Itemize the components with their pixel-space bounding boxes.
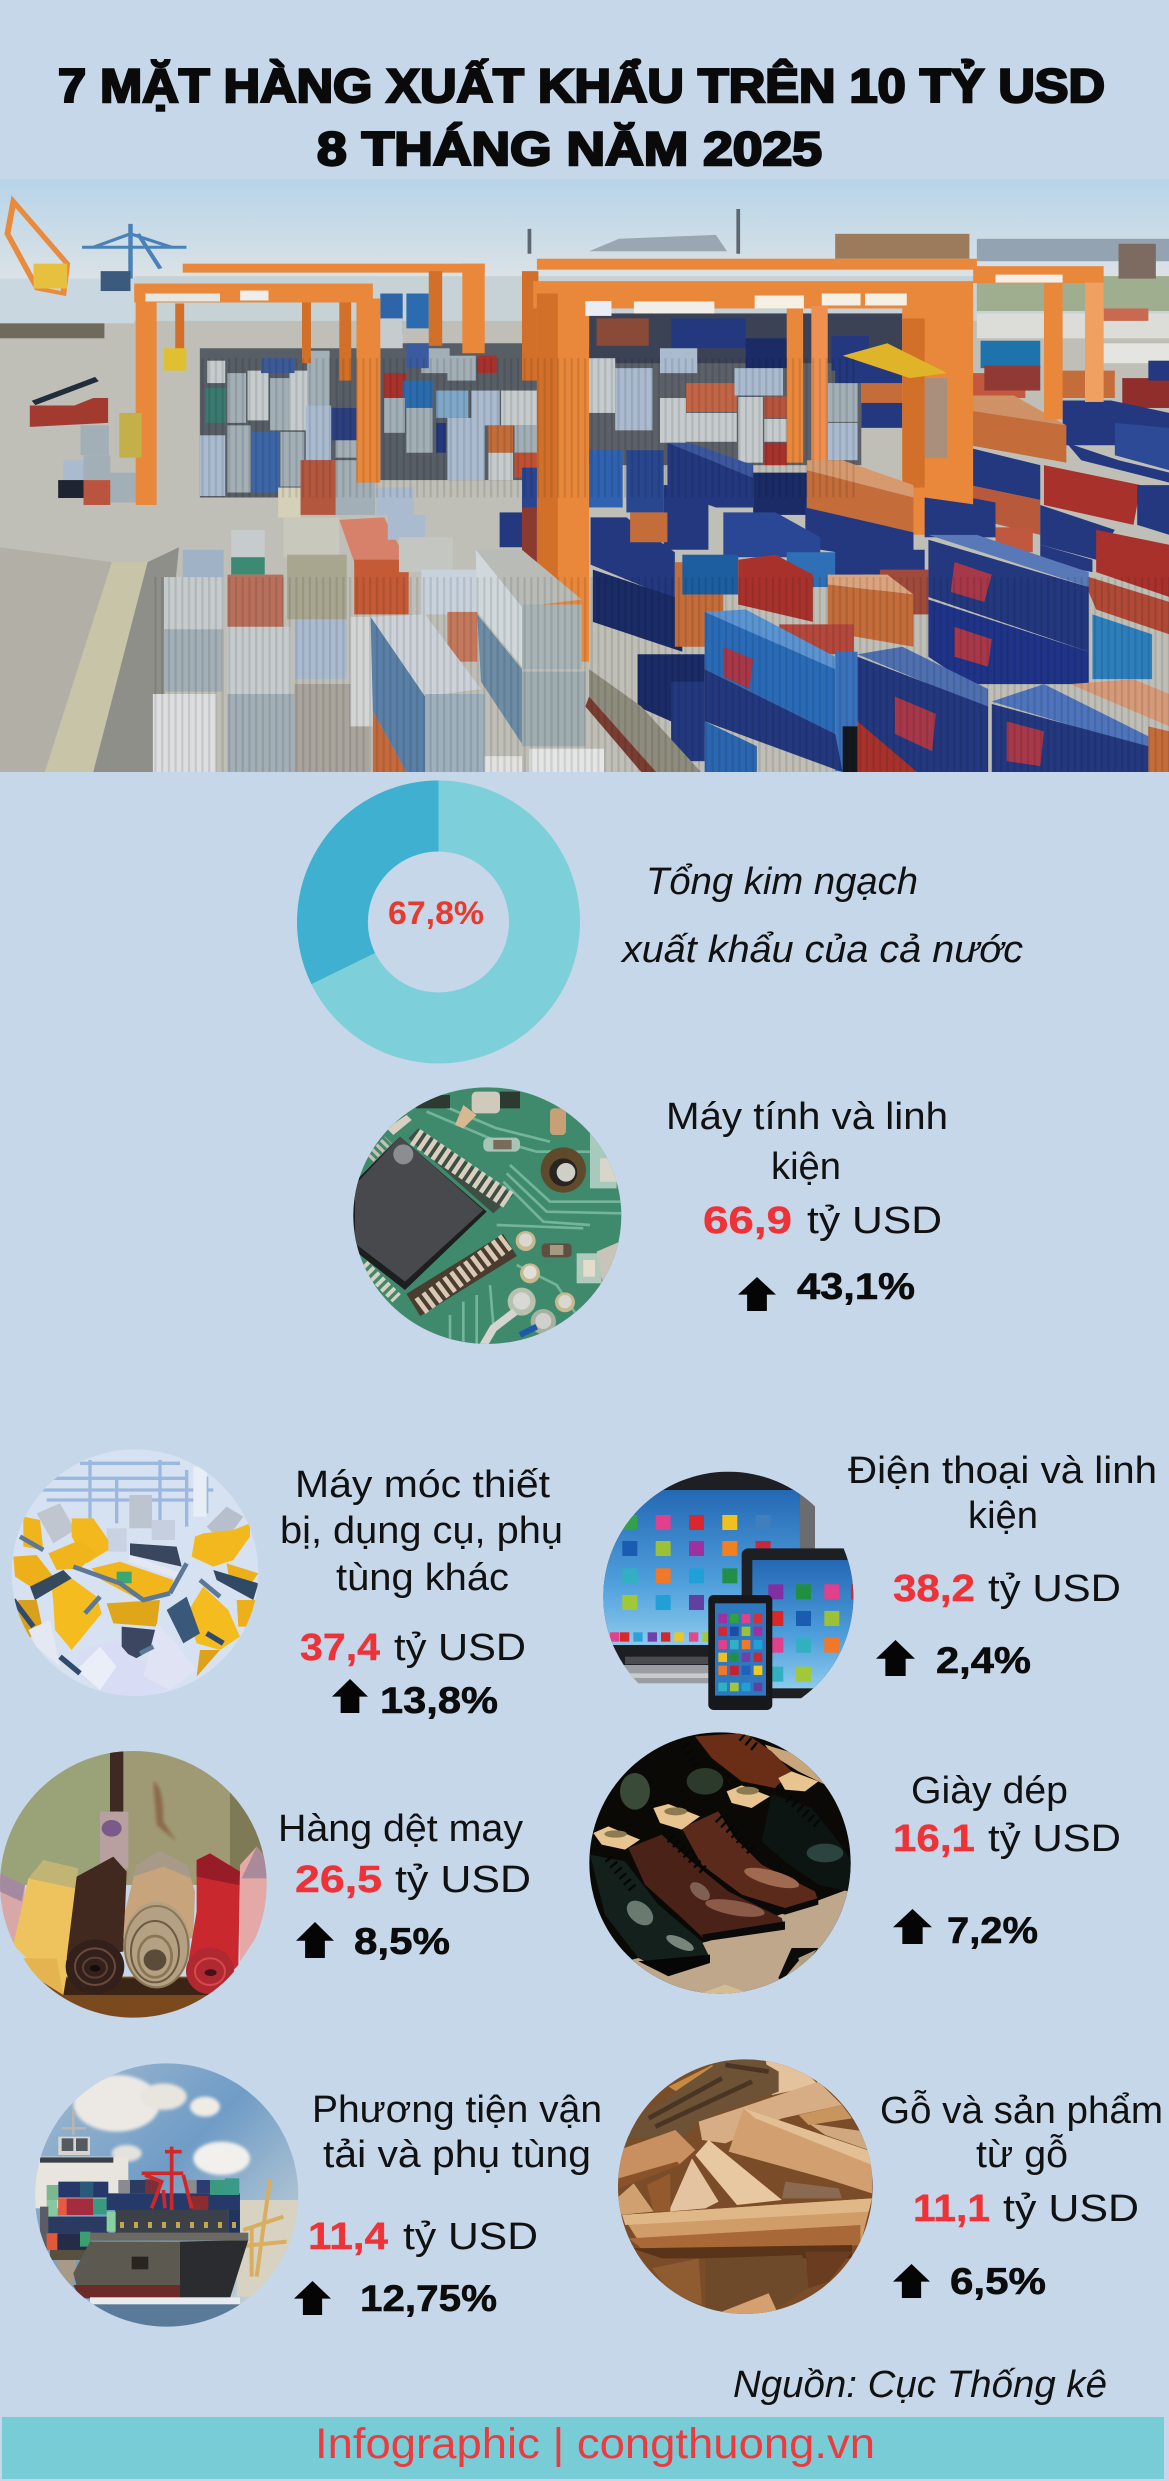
photo: split firewood: [612, 2055, 880, 2323]
value: tỷ USD: [394, 1627, 526, 1669]
donut caption: Tổng kim ngạch: [646, 861, 918, 903]
growth: 43,1%: [797, 1266, 915, 1307]
donut chart: 67,8%: [297, 780, 580, 1064]
label: [880, 2089, 1163, 2176]
value: tỷ USD: [1003, 2188, 1139, 2230]
label: kiện: [968, 1495, 1038, 1537]
photo: leather shoes: [585, 1728, 855, 1998]
label: Phương tiện vận: [312, 2089, 602, 2131]
value: tỷ USD: [395, 1859, 531, 1901]
value: [295, 1859, 531, 1901]
label: Máy móc thiết: [295, 1464, 550, 1506]
left stacks: [81, 425, 109, 455]
label: [848, 1450, 1157, 1537]
label: tùng khác: [336, 1557, 509, 1599]
icon: up arrow: [893, 1909, 932, 1944]
value: [300, 1627, 526, 1669]
icon: up arrow: [893, 2264, 930, 2298]
title: [58, 59, 1105, 175]
dark gaps under stacks: [200, 348, 360, 498]
value: tỷ USD: [988, 1568, 1121, 1610]
value: [893, 1818, 1121, 1860]
growth: 12,75%: [360, 2278, 497, 2319]
value: tỷ USD: [403, 2216, 538, 2258]
panel: textiles: [0, 1745, 531, 2020]
back gantry cranes: [183, 264, 485, 273]
foreground left containers: [45, 562, 148, 772]
photo: laptop tablet and phone: [595, 1472, 862, 1710]
title: 7 MẶT HÀNG XUẤT KHẨU TRÊN 10 TỶ USD: [58, 59, 1105, 112]
label: Gỗ và sản phẩm: [880, 2089, 1163, 2132]
right middle stacks: [597, 318, 649, 346]
value: [893, 1568, 1121, 1610]
icon: up arrow: [332, 1679, 368, 1713]
left gantry crane: [134, 284, 373, 302]
photo: factory robots: [12, 1450, 258, 1696]
label: Điện thoại và linh: [848, 1450, 1157, 1492]
growth: 6,5%: [950, 2261, 1046, 2302]
icon: up arrow: [296, 1922, 334, 1958]
growth: 7,2%: [947, 1910, 1038, 1951]
value: [308, 2216, 538, 2258]
value: [913, 2188, 1139, 2230]
middle stacks: [380, 294, 403, 333]
value: 11,1: [913, 2188, 990, 2230]
icon: up arrow: [738, 1277, 776, 1311]
panel: footwear: [585, 1728, 1121, 1998]
label: [312, 2089, 602, 2176]
source note: Nguồn: Cục Thống kê: [733, 2364, 1107, 2406]
label: Hàng dệt may: [278, 1808, 523, 1850]
photo: circuit board chip: [350, 1085, 625, 1348]
photo: container port with orange gantry cranes: [0, 179, 1169, 776]
label: bị, dụng cụ, phụ: [280, 1510, 563, 1552]
main gantry crane: [533, 281, 973, 308]
footer text: Infographic | congthuong.vn: [315, 2420, 875, 2468]
label: Máy tính và linh: [666, 1096, 948, 1138]
far right stacks: [977, 313, 1169, 338]
value: tỷ USD: [807, 1200, 942, 1242]
donut caption: xuất khẩu của cả nước: [620, 929, 1023, 971]
icon: up arrow: [876, 1640, 915, 1676]
footer bar: [2, 2417, 1164, 2479]
title: 8 THÁNG NĂM 2025: [317, 122, 822, 175]
value: 37,4: [300, 1627, 380, 1669]
photo: container ship: [30, 2060, 303, 2333]
label: kiện: [771, 1146, 841, 1188]
value: tỷ USD: [988, 1818, 1121, 1860]
foreground right containers: [589, 450, 623, 507]
panel: vehicles and parts: [30, 2060, 602, 2333]
growth: 2,4%: [936, 1640, 1031, 1681]
icon: up arrow: [294, 2281, 331, 2315]
panel: wood products: [612, 2055, 1163, 2323]
label: [280, 1464, 563, 1599]
photo: fabric rolls: [0, 1745, 275, 2020]
panel: computers and components: [350, 1085, 948, 1348]
label: tải và phụ tùng: [323, 2134, 591, 2176]
growth: 8,5%: [354, 1921, 450, 1962]
value: 26,5: [295, 1859, 382, 1901]
growth: 13,8%: [380, 1680, 498, 1721]
value: [703, 1200, 942, 1242]
panel: machinery and equipment: [0, 1440, 563, 1721]
value: 11,4: [308, 2216, 388, 2258]
value: 16,1: [893, 1818, 975, 1860]
donut caption: [620, 861, 1023, 971]
donut value: 67,8%: [388, 895, 484, 931]
label: [666, 1096, 948, 1188]
value: 38,2: [893, 1568, 975, 1610]
label: Giày dép: [911, 1770, 1068, 1812]
value: 66,9: [703, 1200, 792, 1242]
label: từ gỗ: [976, 2133, 1068, 2176]
panel: phones and components: [595, 1450, 1157, 1710]
